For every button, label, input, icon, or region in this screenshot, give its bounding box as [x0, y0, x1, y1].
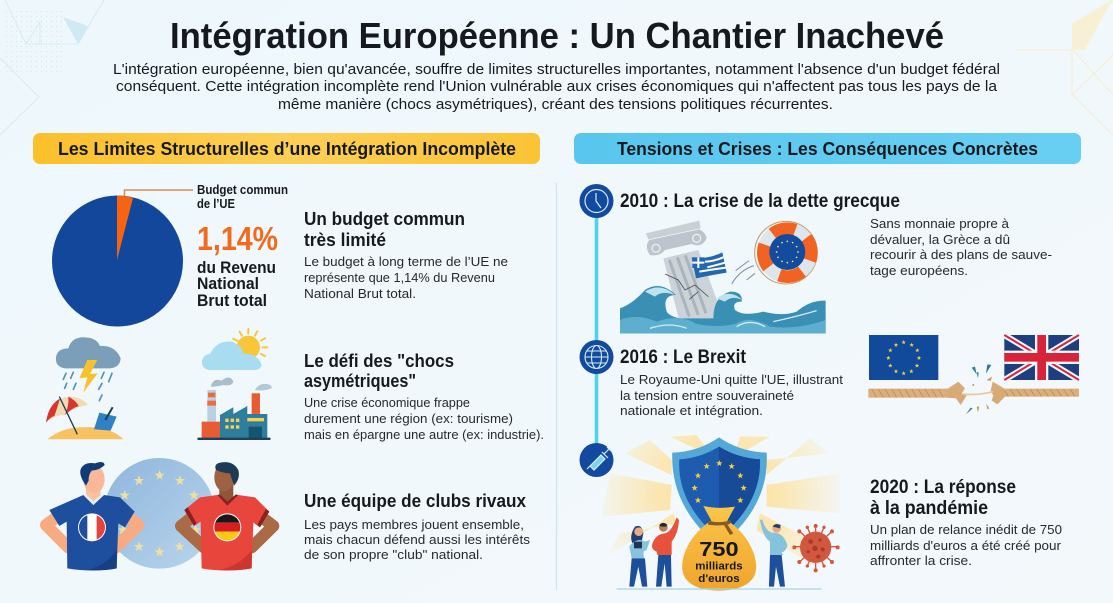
text block: rival clubs: Les pays membres jouent ensemble,	[304, 517, 524, 532]
heading: 2010: 2010 : La crise de la dette grecque	[620, 191, 900, 212]
text block: asymmetric shocks: mais en épargne une autre (ex: industrie).	[304, 427, 544, 442]
sunburst rays	[602, 435, 840, 563]
icon: syringe	[580, 443, 614, 477]
icon: storm over beach	[46, 337, 123, 439]
pie label: de l’UE	[197, 197, 235, 211]
text block: Greek crisis: tage européens.	[870, 263, 968, 278]
text block: asymmetric shocks: durement une région (ex: tourisme)	[304, 411, 513, 426]
pie chart: EU budget share	[52, 190, 193, 326]
text block: budget: Le budget à long terme de l’UE ne	[304, 254, 508, 269]
heading: 2020: à la pandémie	[870, 498, 988, 519]
illustration: Greek column in waves with lifebuoy	[620, 219, 826, 333]
money bag with amount: d'euros	[698, 573, 740, 585]
virus	[792, 524, 840, 572]
text block: budget: Un budget commun	[304, 209, 465, 229]
text block: Greek crisis: Sans monnaie propre à	[870, 216, 1010, 231]
heading: 2016: 2016 : Le Brexit	[620, 347, 747, 368]
EU circle with stars	[104, 458, 215, 569]
intro text: conséquent. Cette intégration incomplète rend l'Union vulnérable aux crises économiques qui n'affectent pas tous les pays de la	[116, 79, 998, 95]
right section header: Tensions et Crises : Les Conséquences Concrètes	[617, 138, 1038, 159]
text block: budget: très limité	[304, 230, 386, 250]
pie label	[197, 183, 288, 310]
pie label: Brut total	[197, 291, 267, 310]
player: France	[46, 462, 138, 570]
text block: asymmetric shocks: asymétriques"	[304, 371, 416, 391]
icon: globe	[580, 340, 614, 374]
pie label: 1,14%	[197, 220, 278, 257]
text block: budget: National Brut total.	[304, 286, 416, 301]
illustration: flags and broken rope	[868, 335, 1079, 414]
text block: rival clubs: mais chacun défend aussi les intérêts	[304, 532, 531, 547]
shield	[672, 437, 767, 547]
text block: recovery plan: Un plan de relance inédit de 750	[870, 522, 1062, 537]
text block: rival clubs: de son propre "club" national.	[304, 547, 483, 562]
text block: Greek crisis	[870, 216, 1052, 278]
text block: Brexit: la tension entre souveraineté	[620, 388, 794, 403]
icon: rival club players with EU circle	[46, 458, 273, 570]
pie label: du Revenu	[197, 258, 276, 277]
text block: budget: représente que 1,14% du Revenu	[304, 270, 495, 285]
text block: budget	[304, 209, 508, 301]
Greek flag	[692, 252, 727, 278]
money bag with amount: milliards	[695, 560, 743, 572]
timeline line	[595, 200, 598, 460]
people	[617, 517, 822, 589]
left section header	[33, 133, 540, 164]
text block: asymmetric shocks: Une crise économique frappe	[304, 395, 470, 410]
UK flag	[1004, 335, 1079, 380]
text block: Brexit: Le Royaume-Uni quitte l'UE, illustrant	[620, 372, 843, 387]
heading: 2020: 2020 : La réponse	[870, 477, 1016, 498]
illustration: recovery plan shield, bag and people	[602, 435, 840, 591]
waves	[620, 286, 826, 333]
broken rope	[868, 364, 1079, 414]
pie label: National	[197, 274, 259, 293]
intro text: même manière (chocs asymétriques), créant des tensions politiques récurrentes.	[278, 97, 833, 113]
right section header	[574, 133, 1081, 164]
money bag with amount: 750	[699, 539, 739, 561]
text block: Greek crisis: dévaluer, la Grèce a dû	[870, 232, 1010, 247]
intro text	[113, 62, 1000, 113]
text block: asymmetric shocks	[304, 351, 544, 442]
text block: Brexit	[620, 372, 843, 418]
EU flag	[869, 335, 938, 380]
icon: sun and factory	[197, 329, 272, 440]
text block: recovery plan: affronter la crise.	[870, 553, 972, 568]
heading: 2020	[870, 477, 1016, 519]
text block: Brexit: nationale et intégration.	[620, 403, 763, 418]
text block: rival clubs: Une équipe de clubs rivaux	[304, 491, 526, 511]
text block: asymmetric shocks: Le défi des "chocs	[304, 351, 454, 371]
player: Germany	[181, 462, 273, 570]
intro text: L'intégration européenne, bien qu'avancée, souffre de limites structurelles importantes, notamment l'absence d'un budget fédéral	[113, 62, 1000, 78]
pie label: Budget commun	[197, 183, 288, 197]
lifebuoy	[754, 219, 821, 286]
text block: rival clubs	[304, 491, 531, 562]
left section header: Les Limites Structurelles d’une Intégration Incomplète	[58, 138, 516, 159]
text block: recovery plan	[870, 522, 1062, 568]
icon: clock	[580, 184, 614, 218]
title: Intégration Européenne : Un Chantier Inachevé	[170, 15, 944, 56]
money bag with amount	[682, 506, 756, 591]
column	[646, 221, 726, 326]
text block: recovery plan: milliards d'euros a été créé pour	[870, 538, 1062, 553]
text block: Greek crisis: recourir à des plans de sauve-	[870, 247, 1052, 262]
